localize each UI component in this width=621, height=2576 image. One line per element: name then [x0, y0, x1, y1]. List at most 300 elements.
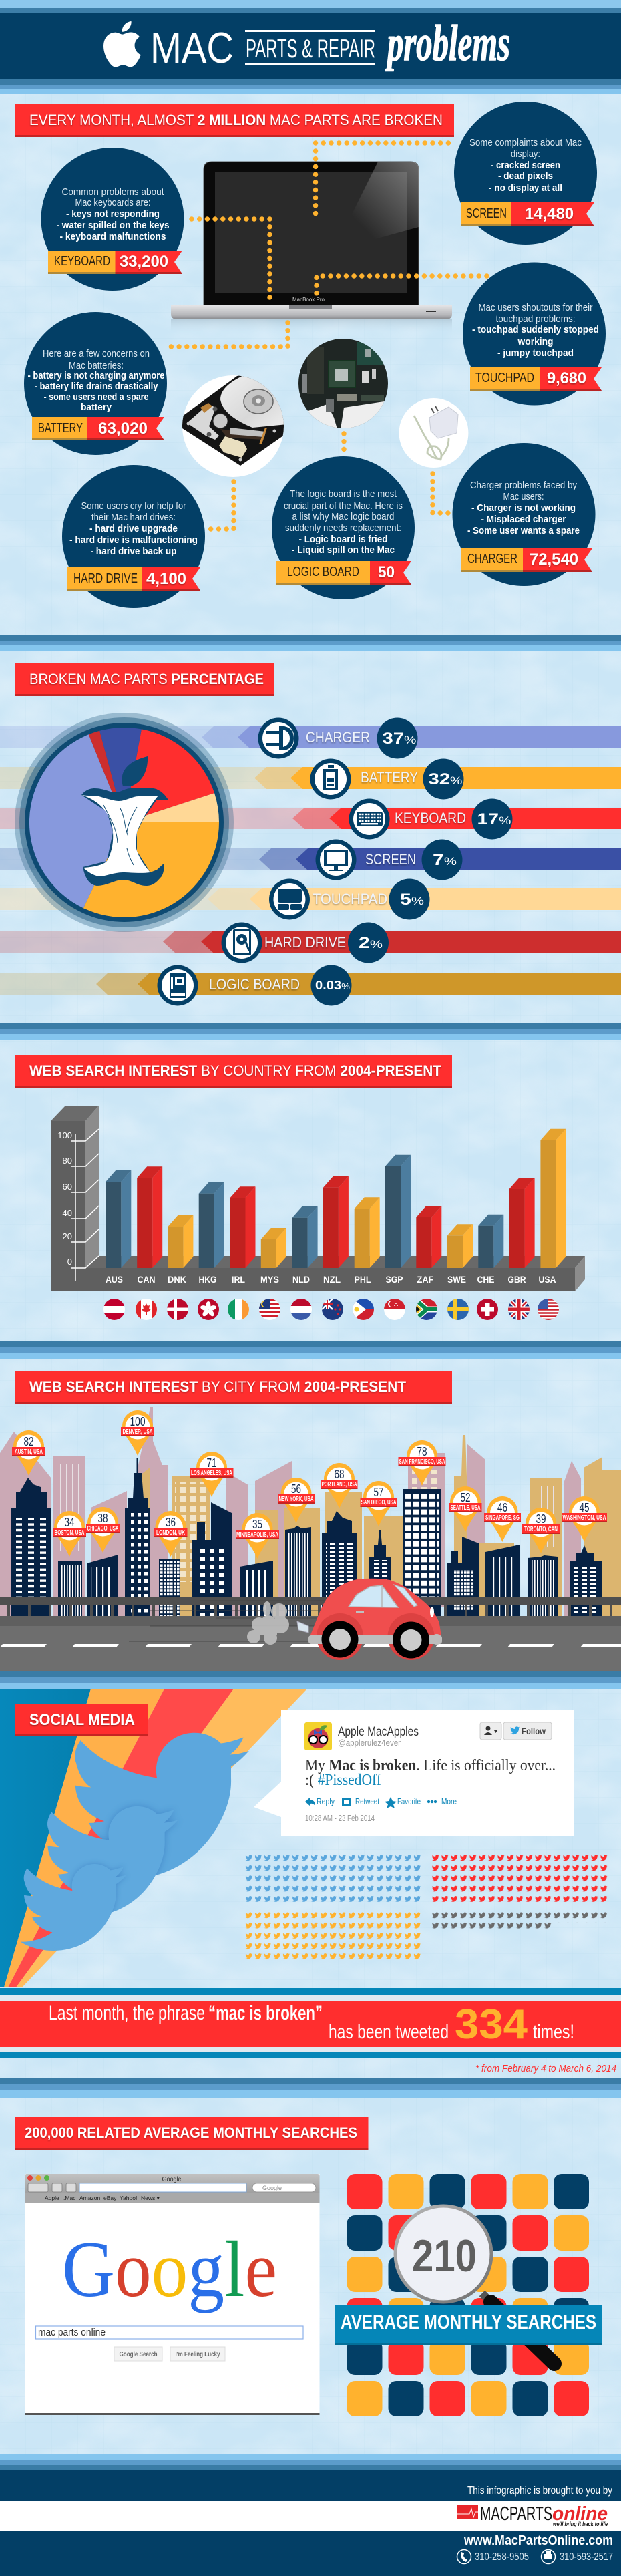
flag: Singapore [384, 1299, 405, 1320]
pin: Denver [121, 1410, 154, 1456]
heading: city: WEB SEARCH INTEREST BY CITY FROM 2004-PRESENT [29, 1378, 407, 1395]
row: keyboard [349, 799, 513, 839]
bar: keyboard ribbon [0, 808, 621, 829]
panel: screen [454, 102, 597, 245]
ribbon: screen: 14,480 [525, 205, 574, 223]
row: charger: CHARGER [306, 729, 370, 746]
dotted connector: battery [164, 323, 288, 347]
section band [0, 1671, 621, 1689]
panel: keyboard: Mac keyboards are: [75, 197, 151, 208]
callout band: tweeted 334 times: “mac is broken” [208, 2002, 323, 2024]
percentage: 5: 5% [400, 891, 424, 909]
pin: Chicago [86, 1507, 120, 1553]
icon: keyboard [349, 799, 390, 839]
pin: Denver: 100 [130, 1415, 146, 1428]
pin: London: LONDON, UK [156, 1529, 186, 1537]
country labels: HKG [199, 1274, 217, 1285]
bar: screen ribbon [0, 848, 621, 870]
panel: screen: - cracked screen [491, 160, 560, 171]
percentage: 37 [377, 717, 418, 759]
dotted connector: touchpad [317, 276, 487, 299]
panel: charger: - Charger is not working [471, 502, 576, 514]
bar: CHE [478, 1215, 503, 1268]
header band [0, 0, 621, 94]
ribbon: logic board: LOGIC BOARD [287, 565, 359, 579]
ribbon: battery [32, 417, 164, 440]
country labels [106, 1274, 556, 1285]
tweet card [254, 1710, 574, 1836]
footer [0, 2470, 621, 2576]
bar: GBR [509, 1178, 535, 1268]
heading: city [15, 1371, 452, 1404]
bar: charger ribbon [0, 726, 621, 748]
heading: social media [15, 1704, 148, 1736]
panel: logic board: - Liquid spill on the Mac [292, 544, 395, 556]
bar: CAN [137, 1166, 162, 1268]
pin: San Francisco: SAN FRANCISCO, USA [399, 1458, 445, 1466]
panel: hard drive: - hard drive upgrade [89, 523, 178, 534]
heading: searches: 200,000 RELATED AVERAGE MONTHLY SEARCHES [25, 2124, 357, 2141]
country labels: SGP [386, 1274, 403, 1285]
title: parts and repair [245, 30, 375, 65]
pin: Chicago: 38 [97, 1512, 108, 1525]
row: battery: BATTERY [361, 769, 418, 786]
panel: hard drive: their Mac hard drives: [91, 512, 176, 523]
panel: keyboard: - water spilled on the keys [56, 220, 170, 231]
panel: logic board [272, 456, 415, 599]
tweet actions: Favorite [397, 1796, 421, 1806]
pin: San Francisco: 78 [417, 1445, 427, 1458]
panel: screen: - no display at all [489, 182, 562, 194]
flags row [104, 1299, 559, 1320]
building 1 [11, 1478, 51, 1616]
panel: touchpad: - touchpad suddenly stopped [472, 324, 599, 335]
pin: San Diego [361, 1481, 397, 1526]
heading: country [15, 1055, 452, 1088]
panel: charger [453, 443, 596, 586]
bar: AUS [106, 1170, 131, 1268]
pin: Singapore: SINGAPORE, SG [485, 1514, 520, 1522]
pin: San Diego: SAN DIEGO, USA [361, 1499, 397, 1506]
tweet actions: Reply [317, 1796, 335, 1806]
icon: medium twitter bird [47, 1806, 176, 1912]
callout band: tweeted 334 times: has been tweeted [329, 2021, 449, 2043]
heading: social media: SOCIAL MEDIA [29, 1711, 135, 1729]
pin: Boston: BOSTON, USA [55, 1529, 84, 1537]
building 4 [125, 1458, 150, 1616]
panel: screen: display: [511, 148, 540, 160]
panel: keyboard [41, 148, 184, 291]
ribbon: touchpad: TOUCHPAD [475, 371, 534, 385]
tweet card: 10:28 AM - 23 Feb 2014 [305, 1813, 375, 1823]
browser window [25, 2174, 319, 2415]
icon: plug [258, 717, 299, 759]
ribbon: battery: 63,020 [98, 420, 148, 438]
axis labels: 80 [63, 1156, 72, 1166]
laptop: MacBook Pro [292, 297, 325, 303]
row: hard drive [222, 922, 389, 963]
pin: Seattle [449, 1486, 482, 1532]
pin: Toronto [522, 1508, 560, 1553]
country labels: PHL [354, 1274, 371, 1285]
axis [71, 1129, 99, 1281]
section band [0, 2454, 621, 2470]
callout band: tweeted 334 times: times! [533, 2021, 574, 2043]
icon: small twitter bird [21, 1864, 127, 1951]
google logo: Google [62, 2225, 277, 2313]
country labels: NLD [292, 1274, 310, 1285]
pie chart [15, 713, 234, 932]
panel: battery: - battery life drains drastically [35, 381, 158, 392]
title: MAC: MAC [150, 23, 234, 72]
title: parts and repair: PARTS & REPAIR [246, 35, 375, 63]
search box [36, 2326, 303, 2339]
panel: screen: - dead pixels [498, 170, 553, 182]
row: screen: SCREEN [365, 851, 416, 868]
flag: South Africa [416, 1299, 437, 1320]
bar: SWE [447, 1224, 473, 1268]
contact: phone: 310-258-9505 [475, 2551, 529, 2563]
image: hard drive [182, 374, 287, 477]
ribbon: hard drive [67, 567, 200, 591]
axis labels: 40 [63, 1208, 72, 1218]
pin: Boston: 34 [64, 1516, 75, 1529]
panel: logic board: suddenly needs replacement: [285, 522, 401, 534]
search box: mac parts online [38, 2327, 106, 2338]
bookmarks: eBay [104, 2195, 117, 2201]
icon: monitor [315, 839, 357, 880]
row: charger [258, 717, 418, 759]
section band [0, 635, 621, 651]
logo: MACPARTS [480, 2503, 552, 2525]
flag: United Kingdom [508, 1299, 530, 1320]
exhaust smoke [247, 1601, 289, 1645]
pin: Portland: 68 [334, 1468, 345, 1481]
flag: Denmark [167, 1299, 188, 1320]
bar: DNK [168, 1215, 193, 1268]
panel: charger: Charger problems faced by [470, 480, 577, 491]
row: touchpad [269, 879, 430, 919]
callout band: tweeted 334 times: 334 [455, 2001, 528, 2048]
bar: battery ribbon [0, 767, 621, 789]
avatar [304, 1722, 332, 1750]
road [0, 1616, 621, 1671]
icon: hard disk [222, 922, 262, 963]
panel: charger: - Misplaced charger [481, 514, 566, 525]
pin: Portland [321, 1463, 358, 1508]
banner: average monthly searches [335, 2305, 602, 2345]
callout band: tweeted 334 times: Last month, the phrase [49, 2002, 205, 2024]
pin: Toronto: TORONTO, CAN [524, 1526, 558, 1533]
pin: New York [278, 1478, 315, 1523]
panel: screen: Some complaints about Mac [469, 137, 582, 148]
bookmarks [45, 2195, 160, 2201]
flag: Philippines [353, 1299, 374, 1320]
panel: keyboard: - keyboard malfunctions [60, 231, 166, 243]
panel: battery: battery [81, 401, 112, 413]
bookmarks: News ▾ [141, 2195, 160, 2201]
contact: phone [457, 2549, 529, 2564]
pin: London: 36 [166, 1516, 176, 1529]
pin: Seattle: 52 [461, 1491, 470, 1504]
tweet actions [305, 1796, 457, 1808]
image: charger [399, 398, 469, 468]
flag: Ireland [228, 1299, 249, 1320]
pin: Boston [53, 1511, 86, 1557]
building 3 [87, 1555, 118, 1616]
panel: battery: - some users need a spare [44, 391, 148, 403]
country labels: SWE [447, 1274, 466, 1285]
bar: NZL [323, 1176, 349, 1268]
ribbon: keyboard: KEYBOARD [54, 254, 110, 269]
country labels: DNK [168, 1274, 186, 1285]
button: feeling lucky [170, 2347, 225, 2361]
ribbon: logic board: 50 [378, 563, 395, 581]
icon: touchpad [269, 879, 310, 919]
country labels: AUS [106, 1274, 123, 1285]
button: google search [114, 2347, 162, 2361]
pin: New York: 56 [291, 1482, 301, 1496]
toolbar controls: Google [262, 2185, 282, 2191]
pin: Minneapolis [236, 1513, 279, 1559]
dotted connector: logic board [341, 434, 347, 450]
logo: online [552, 2503, 608, 2525]
flag: United States [538, 1299, 559, 1320]
percentage: 32 [423, 759, 463, 799]
panel: charger: Mac users: [503, 491, 544, 502]
ribbon: hard drive: HARD DRIVE [73, 571, 138, 586]
pin: Minneapolis: 35 [252, 1518, 262, 1531]
row: logic board: LOGIC BOARD [209, 976, 300, 993]
row: screen [315, 839, 462, 880]
heading: searches [15, 2117, 369, 2150]
ribbon: touchpad [470, 367, 602, 391]
panel: logic board: crucial part of the Mac. Here is [284, 500, 403, 512]
skyline: front buildings [11, 1458, 602, 1616]
bar: NLD [292, 1206, 318, 1268]
row: keyboard: KEYBOARD [395, 810, 466, 826]
percentage: 7: 7% [433, 851, 457, 869]
percentage: 7 [422, 839, 462, 880]
bar: PHL [355, 1197, 380, 1268]
building 10 [369, 1530, 391, 1616]
pin: San Francisco [398, 1440, 446, 1486]
building 6 [192, 1502, 232, 1616]
ribbon: screen: SCREEN [466, 206, 507, 221]
row: logic board [158, 965, 351, 1006]
dotted connector: keyboard [192, 219, 270, 297]
follow button [503, 1722, 552, 1740]
logo: we'll bring it back to life [553, 2521, 608, 2527]
percentage: 2 [348, 922, 389, 963]
flag: Switzerland [477, 1299, 498, 1320]
percentage: 2: 2% [359, 934, 383, 952]
pin: Los Angeles: LOS ANGELES, USA [191, 1470, 232, 1477]
percentage: 32: 32 % [429, 770, 462, 788]
panel: logic board: - Logic board is fried [299, 534, 387, 545]
flag: Austria [104, 1299, 125, 1320]
magnifier: 210 [412, 2231, 477, 2281]
pin: Los Angeles [190, 1452, 234, 1497]
pin: Washington [562, 1496, 607, 1542]
panel: touchpad: - jumpy touchpad [497, 347, 574, 359]
bar: SGP [385, 1155, 411, 1268]
tweet card: Apple MacApples [338, 1725, 419, 1739]
percentage: 0.03: 0.03 % [315, 979, 350, 992]
panel: touchpad [463, 262, 606, 405]
tweet text: :( #PissedOff [305, 1772, 381, 1789]
guard rail [0, 1597, 621, 1617]
pin: Los Angeles: 71 [207, 1456, 216, 1470]
bird grid: orange [246, 1912, 423, 1964]
country labels: ZAF [417, 1274, 434, 1285]
flag: Netherlands [290, 1299, 312, 1320]
pin: Portland: PORTLAND, USA [321, 1481, 357, 1488]
heading: broken parts: BROKEN MAC PARTS PERCENTAGE [29, 671, 264, 687]
magnifier [395, 2206, 554, 2364]
pin: Austin: AUSTIN, USA [15, 1448, 43, 1456]
pin: Toronto: 39 [536, 1512, 546, 1526]
flag: Sweden [447, 1299, 469, 1320]
pin: Singapore: 46 [497, 1501, 507, 1514]
panel: battery [24, 312, 167, 455]
pin: Denver: DENVER, USA [123, 1428, 152, 1436]
building 14 [528, 1555, 558, 1616]
ribbon: charger: CHARGER [467, 552, 518, 567]
building 15 [570, 1545, 602, 1616]
country labels: CHE [477, 1274, 494, 1285]
section band [0, 1341, 621, 1359]
ribbon: logic board [276, 561, 411, 585]
axis labels: 0 [67, 1257, 72, 1267]
car [129, 1579, 442, 1660]
pin: Seattle: SEATTLE, USA [450, 1504, 481, 1512]
country labels: GBR [507, 1274, 526, 1285]
dotted connector: hard drive [210, 482, 234, 529]
motion lines [129, 1601, 352, 1641]
bookmarks: Amazon [79, 2195, 100, 2201]
panel: keyboard: - keys not responding [66, 208, 160, 220]
country labels: NZL [323, 1274, 341, 1285]
ribbon: charger [461, 548, 592, 572]
ribbon: hard drive: 4,100 [146, 570, 186, 588]
logo [457, 2503, 608, 2527]
bookmarks: Apple [45, 2195, 59, 2201]
tweet actions: Retweet [355, 1796, 379, 1806]
traffic lights [27, 2175, 49, 2181]
bookmarks: Yahoo! [120, 2195, 137, 2201]
section band [0, 1023, 621, 1040]
panel: charger: - Some user wants a spare [467, 525, 580, 536]
ribbon: touchpad: 9,680 [547, 369, 586, 387]
building 8 [285, 1526, 311, 1616]
pin: London [154, 1511, 187, 1557]
bookmarks: .Mac [63, 2195, 76, 2201]
button: google search: Google Search [119, 2350, 158, 2358]
bar: MYS [261, 1228, 286, 1268]
panel: hard drive: - hard drive back up [91, 546, 176, 557]
pin: San Diego: 57 [374, 1486, 383, 1499]
ribbon: battery: BATTERY [38, 421, 83, 436]
panel: hard drive: Some users cry for help for [81, 500, 186, 512]
flag: Hong Kong [198, 1299, 219, 1320]
axis labels: 20 [63, 1231, 72, 1241]
section band [0, 2078, 621, 2098]
bar: USA [540, 1129, 566, 1268]
bar: logic board ribbon [0, 973, 621, 995]
building 2 [58, 1561, 82, 1616]
toolbar controls [28, 2183, 316, 2192]
heading: every month [15, 104, 454, 137]
country labels: IRL [232, 1274, 245, 1285]
tweet card: @applerulez4ever [338, 1738, 401, 1748]
heading: country: WEB SEARCH INTEREST BY COUNTRY FROM 2004-PRESENT [29, 1062, 442, 1079]
building 11 [403, 1489, 441, 1616]
country labels: MYS [260, 1274, 279, 1285]
building 9 [322, 1511, 357, 1616]
dotted connector: charger [433, 474, 449, 513]
pin: Austin: 82 [24, 1435, 33, 1448]
ribbon: keyboard: 33,200 [120, 253, 168, 271]
pin: New York: NEW YORK, USA [279, 1496, 314, 1503]
panel: hard drive [62, 465, 205, 608]
city pins [12, 1410, 607, 1559]
country labels: USA [538, 1274, 556, 1285]
bar: HKG [199, 1182, 224, 1268]
image: logic board [298, 339, 389, 429]
percentage: 37: 37 % [382, 730, 417, 748]
pin: Washington: 45 [580, 1501, 589, 1514]
flag: New Zealand [322, 1299, 343, 1320]
percentage: 17 [471, 799, 513, 839]
panel: battery: - battery is not charging anymore [28, 370, 164, 381]
bar: touchpad ribbon [0, 888, 621, 910]
flag: Malaysia [259, 1299, 280, 1320]
percentage: 5 [389, 879, 430, 919]
panel: keyboard: Common problems about [61, 186, 164, 198]
heading: every month: EVERY MONTH, ALMOST 2 MILLION MAC PARTS ARE BROKEN [29, 112, 443, 128]
country labels: CAN [138, 1274, 155, 1285]
pin: Chicago: CHICAGO, USA [87, 1525, 119, 1533]
row: battery [310, 759, 463, 799]
bar: hard drive ribbon [0, 931, 621, 953]
row: hard drive: HARD DRIVE [264, 934, 346, 951]
icon: apple core [81, 756, 168, 886]
panel: touchpad: Mac users shoutouts for their [478, 302, 593, 313]
building 7 [240, 1561, 273, 1616]
ribbon: keyboard [48, 251, 182, 274]
button: feeling lucky: I'm Feeling Lucky [175, 2350, 220, 2358]
flag: Canada [136, 1299, 157, 1320]
pin: Austin [12, 1430, 45, 1476]
title: problems: problems [385, 15, 510, 71]
heading: broken parts [15, 663, 274, 696]
bird grid: grey [432, 1912, 610, 1933]
pin: Minneapolis: MINNEAPOLIS, USA [236, 1531, 278, 1539]
person button [480, 1722, 501, 1740]
axis labels: 100 [57, 1130, 72, 1140]
panel: hard drive: - hard drive is malfunctioning [69, 534, 198, 546]
bar chart: country [51, 1106, 585, 1291]
tweet text [305, 1757, 556, 1789]
icon: chip [158, 965, 198, 1006]
tweet actions: More [441, 1796, 457, 1806]
chart base [51, 1106, 585, 1291]
icon: apple logo [104, 21, 141, 67]
axis labels: 60 [63, 1182, 72, 1192]
panel: battery: Here are a few concerns on [43, 348, 150, 359]
tweet text: My Mac is broken. Life is officially over... [305, 1757, 556, 1774]
